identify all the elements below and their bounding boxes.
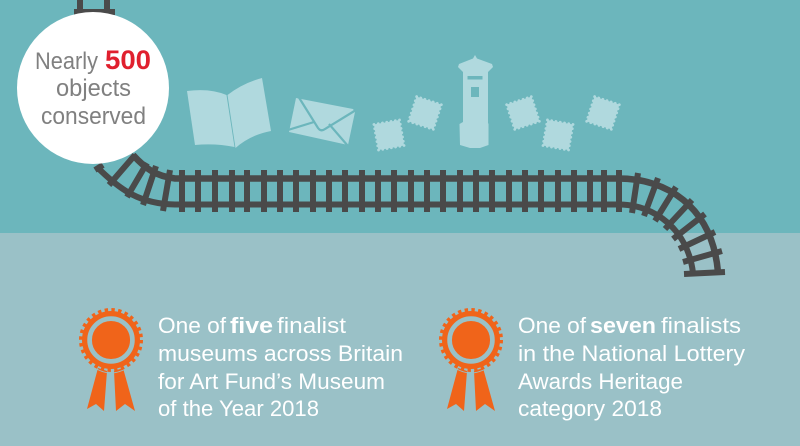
callout circle: nearly 500 objects conserved: Nearly [35, 48, 98, 75]
text: seven finalists: Awards Heritage [518, 369, 683, 394]
callout circle: nearly 500 objects conserved: conserved [41, 103, 146, 130]
text: seven finalists: One of [518, 313, 587, 338]
icon: pillar post box [458, 55, 493, 148]
text: five finalist museums: finalist [277, 313, 346, 338]
text: five finalist museums: of the Year 2018 [158, 396, 319, 421]
railway track [74, 0, 725, 274]
text: five finalist museums: One of [158, 313, 227, 338]
text: seven finalists: in the National Lottery [518, 341, 745, 366]
icon: rosette one [81, 310, 141, 411]
text: seven finalists: finalists [661, 313, 741, 338]
text: seven finalists: seven [590, 313, 656, 338]
text: five finalist museums: museums across Britain [158, 341, 403, 366]
callout circle: nearly 500 objects conserved: 500 [105, 45, 151, 75]
text: five finalist museums [158, 313, 403, 421]
icon: open book [187, 78, 271, 148]
text: five finalist museums: five [230, 313, 273, 338]
icon: rosette two [441, 310, 501, 411]
callout circle: nearly 500 objects conserved: objects [56, 75, 131, 102]
icon: stamps [374, 97, 619, 150]
text: seven finalists: category 2018 [518, 396, 662, 421]
callout circle: nearly 500 objects conserved [17, 12, 169, 164]
text: five finalist museums: for Art Fund’s Museum [158, 369, 385, 394]
icon: envelope [288, 96, 356, 146]
text: seven finalists [518, 313, 745, 421]
